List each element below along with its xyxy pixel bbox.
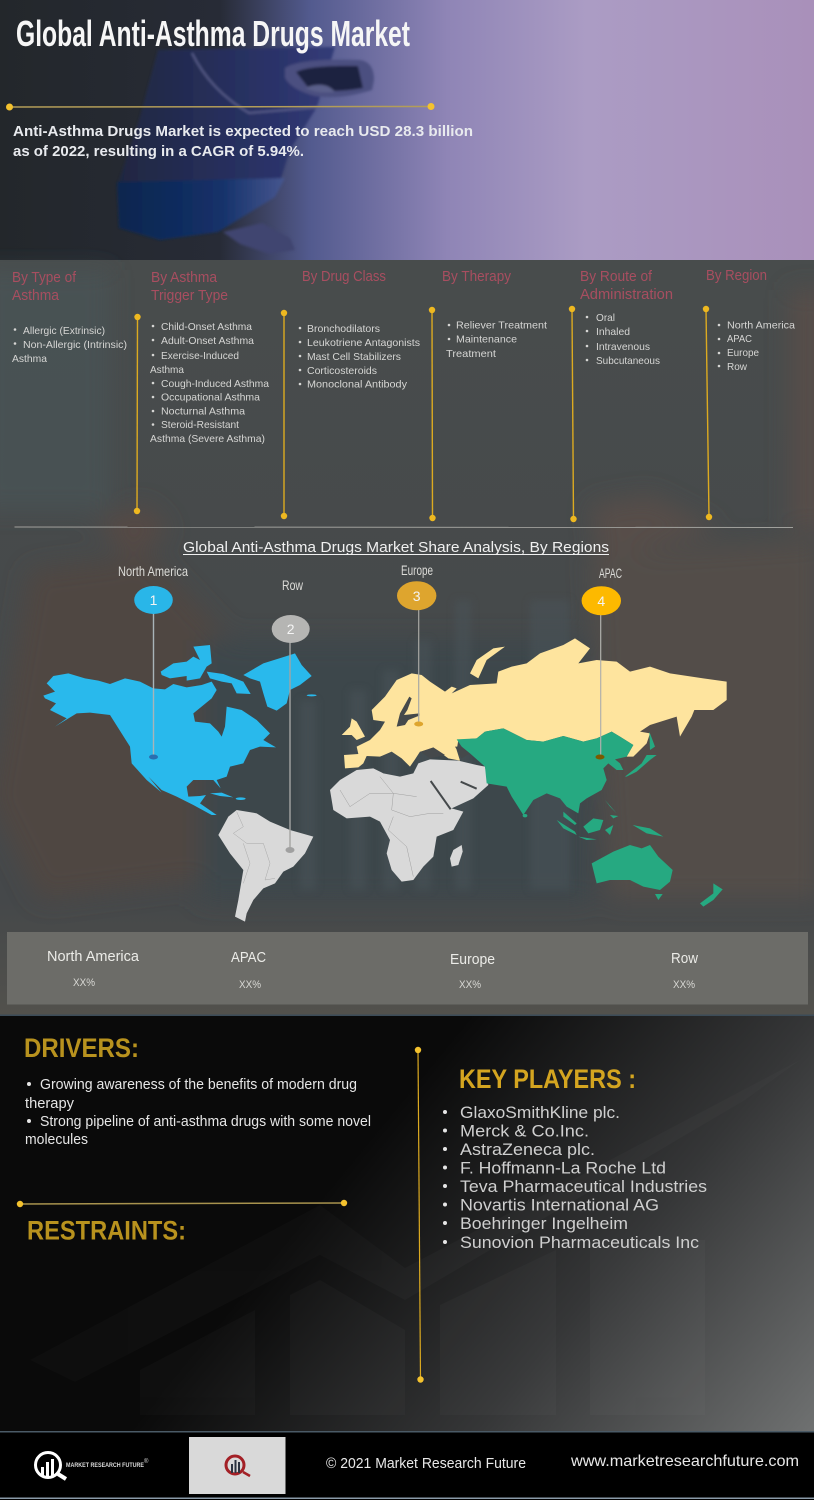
text block: drivers list: therapy [25, 1095, 74, 1112]
map: Americas [43, 645, 317, 922]
divider: header gold line [6, 103, 434, 110]
panel: By Asthma Trigger Type: Asthma (Severe Asthma) [150, 433, 265, 445]
panel: By Therapy: Maintenance [456, 334, 517, 346]
panel: By Therapy: Reliever Treatment [456, 320, 547, 332]
South America [218, 810, 313, 922]
marker: North America pin: 1 [150, 592, 158, 608]
map: Eurasia, Africa, Oceania [330, 638, 727, 907]
Africa and Middle East [330, 759, 488, 882]
panel: By Asthma Trigger Type: Nocturnal Asthma [161, 406, 245, 418]
text block: market summary [13, 123, 473, 160]
panel: By Region: Europe [727, 347, 759, 359]
panel: By Route of Administration: Subcutaneous [596, 355, 660, 367]
text block: market summary: as of 2022, resulting in a CAGR of 5.94%. [13, 143, 304, 160]
panel: By Drug Class: By Drug Class [302, 268, 386, 285]
footer bar [0, 1431, 814, 1500]
text block: drivers list [25, 1076, 371, 1148]
panel: By Drug Class: Corticosteroids [307, 365, 377, 377]
text block: key players list: Teva Pharmaceutical Industries [460, 1177, 707, 1196]
panel: By Region: By Region [706, 267, 767, 284]
panel: regional share table: XX% [459, 979, 481, 991]
marker: APAC pin: APAC [599, 565, 622, 581]
marker: APAC pin: 4 [597, 593, 605, 609]
panel: By Type of Asthma: By Type of [12, 269, 77, 286]
panel: By Asthma Trigger Type: Steroid-Resistant [161, 419, 239, 431]
panel: By Type of Asthma [12, 269, 127, 365]
logo: Market Research Future white: MARKET RESEARCH FUTURE [66, 1463, 144, 1469]
panel: By Asthma Trigger Type: Exercise-Induced [161, 350, 239, 362]
panel: By Asthma Trigger Type: Adult-Onset Asthma [161, 335, 254, 347]
panel: By Type of Asthma: Asthma [12, 287, 60, 304]
marker: Europe pin: 3 [413, 588, 421, 604]
panel: By Route of Administration: Oral [596, 312, 615, 324]
panel: By Asthma Trigger Type: Cough-Induced Asthma [161, 378, 269, 390]
panel: By Therapy: Treatment [446, 348, 496, 360]
marker: Row pin: 2 [287, 621, 295, 637]
heading: key players: KEY PLAYERS : [459, 1064, 636, 1094]
panel: By Therapy [442, 268, 547, 360]
panel: By Asthma Trigger Type: Asthma [150, 364, 184, 376]
title: Global Anti-Asthma Drugs Market [16, 13, 410, 54]
panel: By Route of Administration: Intravenous [596, 341, 650, 353]
panel: By Type of Asthma: Asthma [12, 353, 47, 365]
decorative arrow and bars [30, 1060, 800, 1415]
panel: By Type of Asthma: Non-Allergic (Intrinsic) [23, 339, 127, 351]
panel: By Region [706, 267, 795, 373]
logo: Market Research Future white [36, 1452, 149, 1479]
marker: North America pin [118, 563, 188, 760]
marker: Row pin: Row [282, 577, 304, 593]
panel: By Region: Row [727, 361, 747, 373]
panel: By Asthma Trigger Type: By Asthma [151, 269, 218, 286]
marker: Europe pin [397, 562, 436, 726]
marker: APAC pin [582, 565, 622, 760]
panel: regional share table: APAC [231, 949, 266, 966]
text block: key players list: AstraZeneca plc. [460, 1140, 595, 1159]
panel: By Therapy: By Therapy [442, 268, 511, 285]
panel: By Asthma Trigger Type: Trigger Type [151, 287, 228, 304]
panel: regional share table: Europe [450, 951, 495, 968]
panel: drivers, restraints and key players background [0, 1014, 814, 1431]
panel: By Drug Class: Monoclonal Antibody [307, 378, 408, 390]
panel: regional share table: North America [47, 948, 140, 965]
world map [43, 638, 727, 922]
icon: inhaler background photo [117, 47, 374, 254]
column separators with gold end dots [134, 306, 712, 522]
panel: By Asthma Trigger Type: Occupational Asthma [161, 392, 260, 404]
panel: By Type of Asthma: Allergic (Extrinsic) [23, 325, 105, 337]
text block: market summary: Anti-Asthma Drugs Market is expected to reach USD 28.3 billion [13, 123, 473, 140]
decorative chart bars [300, 600, 570, 890]
Asia and Oceania [457, 728, 723, 907]
Baltic and Black Sea gaps [397, 697, 470, 758]
panel: By Asthma Trigger Type: Child-Onset Asthma [161, 321, 252, 333]
text block: key players list: Boehringer Ingelheim [460, 1214, 628, 1233]
footer website: www.marketresearchfuture.com [570, 1453, 799, 1470]
panel: By Drug Class: Leukotriene Antagonists [307, 337, 420, 349]
panel: By Route of Administration: By Route of [580, 268, 653, 285]
panel: regional share table: Row [671, 950, 698, 967]
heading: market share analysis: Global Anti-Asthma Drugs Market Share Analysis, By Regions [183, 539, 609, 556]
text block: key players list [443, 1103, 707, 1252]
panel: By Drug Class [299, 268, 420, 390]
panel: regional share table: XX% [673, 979, 695, 991]
panel: By Route of Administration: Inhaled [596, 326, 630, 338]
panel: By Route of Administration: Administration [580, 286, 673, 303]
panel: By Route of Administration [580, 268, 673, 367]
panel: regional share table: XX% [73, 977, 95, 989]
panel: By Asthma Trigger Type [150, 269, 269, 445]
panel: header banner [0, 0, 814, 260]
panel: By Drug Class: Mast Cell Stabilizers [307, 351, 401, 363]
marker: Europe pin: Europe [401, 562, 433, 578]
heading: drivers: DRIVERS: [24, 1033, 139, 1063]
logo box: grey with red icon [189, 1437, 286, 1494]
text block: key players list: Merck & Co.Inc. [460, 1122, 589, 1140]
heading: restraints: RESTRAINTS: [27, 1216, 186, 1246]
panel: regional share table: XX% [239, 979, 261, 991]
text block: drivers list: Strong pipeline of anti-asthma drugs with some novel [40, 1113, 371, 1130]
divider: restraints gold line [17, 1200, 347, 1207]
divider: vertical gold line [415, 1047, 424, 1383]
panel: segmentation and map background [0, 260, 814, 1015]
logo: Market Research Future white: ® [144, 1458, 149, 1465]
North America [43, 645, 317, 815]
text block: drivers list: Growing awareness of the benefits of modern drug [40, 1076, 357, 1093]
footer copyright: © 2021 Market Research Future [326, 1455, 526, 1472]
text block: key players list: GlaxoSmithKline plc. [460, 1103, 620, 1122]
marker: Row pin [272, 577, 310, 853]
panel: By Drug Class: Bronchodilators [307, 323, 380, 335]
text block: key players list: Sunovion Pharmaceuticals Inc [460, 1233, 700, 1252]
panel: By Region: North America [727, 320, 795, 332]
text block: key players list: Novartis International AG [460, 1196, 659, 1214]
marker: North America pin: North America [118, 563, 188, 579]
text block: drivers list: molecules [25, 1131, 88, 1148]
panel: regional share table [7, 932, 808, 1004]
panel: By Region: APAC [727, 333, 752, 345]
text block: key players list: F. Hoffmann-La Roche Ltd [460, 1158, 666, 1178]
Europe and Russia [342, 638, 727, 768]
